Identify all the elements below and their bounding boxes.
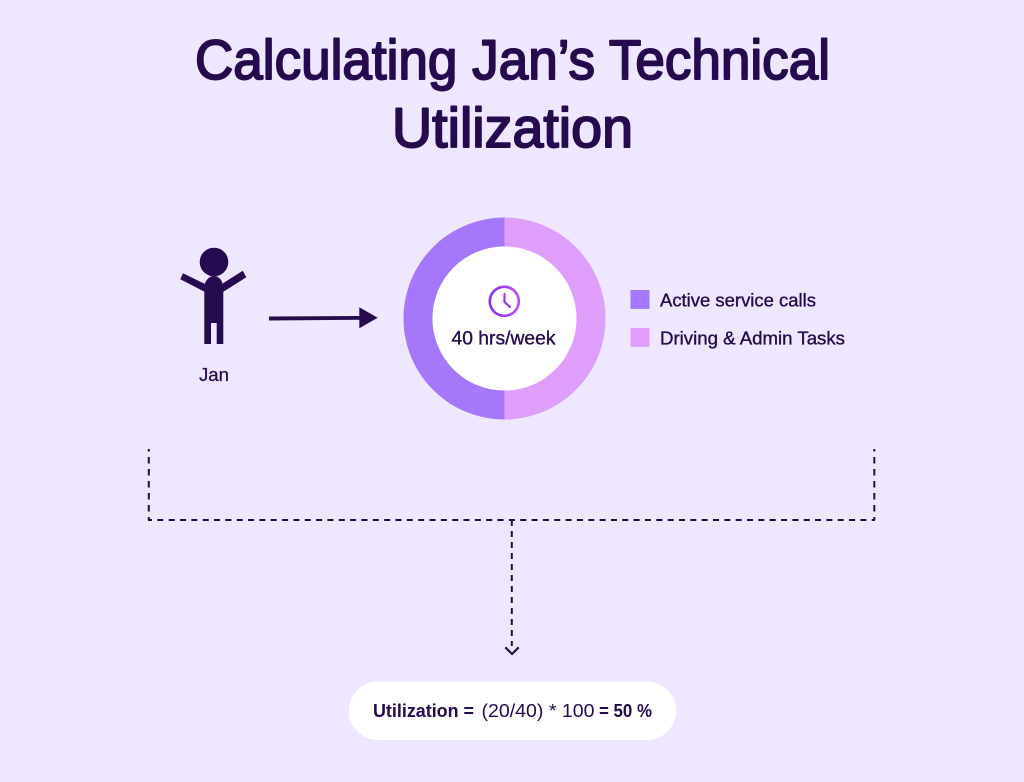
donut chart: 40 hours split evenly	[404, 218, 606, 420]
formula text	[373, 701, 652, 721]
formula text: = 50 %	[599, 701, 652, 721]
title	[195, 28, 830, 159]
title: Utilization	[392, 96, 633, 159]
donut segment: active service calls	[404, 218, 504, 420]
legend swatch: driving and admin tasks	[630, 328, 650, 347]
legend label: active service calls: Active service calls	[660, 290, 816, 310]
legend	[630, 290, 845, 348]
formula text: Utilization =	[373, 701, 474, 721]
dashed bracket	[148, 449, 875, 520]
formula pill	[349, 682, 676, 740]
donut label: 40 hrs/week: 40 hrs/week	[452, 328, 556, 350]
dashed arrow to formula	[505, 520, 519, 654]
arrow: Jan to donut	[269, 307, 378, 328]
icon: Jan person figure	[180, 248, 246, 344]
donut centre	[432, 246, 576, 390]
icon: clock	[490, 287, 519, 316]
label: Jan: Jan	[199, 365, 229, 385]
formula text: (20/40) * 100	[482, 701, 594, 721]
legend swatch: active service calls	[630, 290, 650, 309]
title: Calculating Jan’s Technical	[195, 28, 830, 91]
legend label: driving and admin tasks: Driving & Admin Tasks	[660, 328, 845, 348]
donut segment: driving and admin tasks	[504, 218, 606, 420]
